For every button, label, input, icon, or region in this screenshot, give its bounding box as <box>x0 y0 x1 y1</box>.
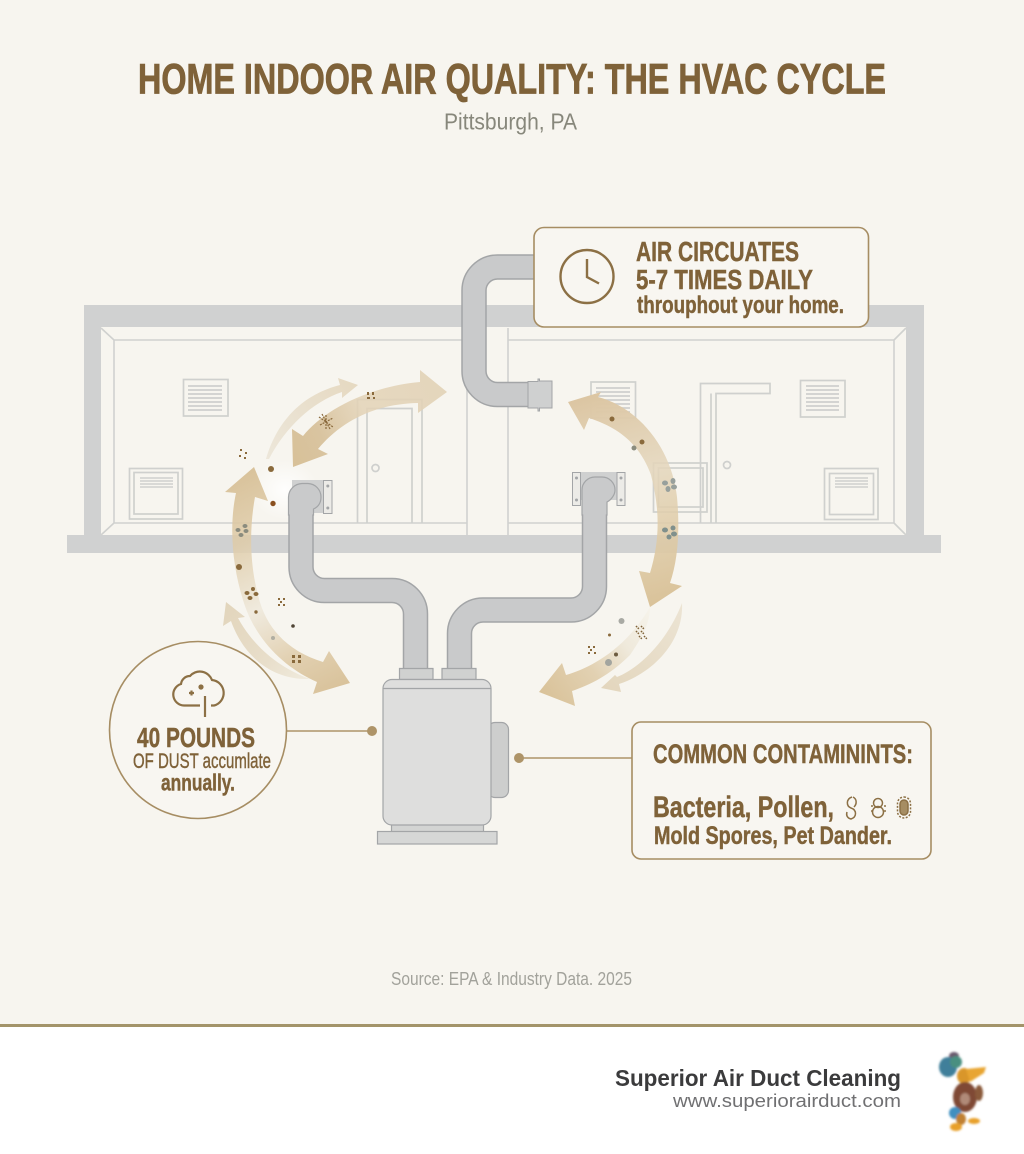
arrow: lower right large <box>539 607 650 706</box>
right register bracket <box>572 472 625 506</box>
right door frame <box>700 384 770 523</box>
icon: clock <box>560 250 614 303</box>
cabinet body <box>383 680 491 825</box>
contaminants line one: Bacteria, Pollen, <box>653 791 834 824</box>
icon: duck mascot <box>939 1052 986 1131</box>
footer band <box>0 1024 1024 1154</box>
left wall vent <box>184 380 228 416</box>
centre wall panel <box>654 463 707 512</box>
air handler unit <box>378 668 508 844</box>
dust particles <box>236 392 677 666</box>
arrow: lower left thin <box>223 602 310 679</box>
footer company name: Superior Air Duct Cleaning <box>615 1065 901 1091</box>
arrow: upper left thin <box>266 378 358 459</box>
source note: Source: EPA & Industry Data. 2025 <box>391 969 632 989</box>
right wall vent two <box>800 380 845 417</box>
duct flange <box>528 379 552 411</box>
callout body: throuphout your home. <box>637 292 844 319</box>
arrow: upper left large double headed <box>292 370 447 467</box>
stat label: OF DUST accumlate <box>133 750 271 773</box>
right return duct <box>460 477 615 670</box>
stat value: 40 POUNDS <box>137 722 255 753</box>
left register bracket <box>292 480 332 514</box>
left return duct <box>288 484 416 670</box>
footer website: www.superiorairduct.com <box>672 1091 901 1111</box>
callout: common contaminants <box>632 722 931 859</box>
connector: unit to contaminants callout <box>514 753 632 763</box>
contaminants heading: COMMON CONTAMININTS: <box>653 739 913 769</box>
callout heading line two: 5-7 TIMES DAILY <box>636 264 813 295</box>
icons: microbes <box>847 797 910 819</box>
top supply duct <box>474 267 552 411</box>
lower right return vent <box>824 468 878 520</box>
callout: dust accumulation <box>110 642 286 818</box>
stat label second line: annually. <box>161 770 235 796</box>
arrow: lower right thin <box>601 603 682 692</box>
connector: dust callout to unit <box>287 726 377 736</box>
base plate <box>378 832 497 844</box>
house outline <box>67 305 941 553</box>
lower left return vent <box>130 468 182 519</box>
contaminants line two: Mold Spores, Pet Dander. <box>654 822 892 850</box>
arrow: left large double headed <box>225 467 350 694</box>
glow near left register <box>251 460 319 520</box>
callout heading line one: AIR CIRCUATES <box>636 236 799 267</box>
left door <box>358 400 422 523</box>
arrow: right large <box>568 392 682 607</box>
side panel <box>488 722 508 798</box>
icon: dust cloud <box>173 672 224 717</box>
base foot <box>392 824 484 832</box>
inlet collars <box>400 668 476 680</box>
callout: air circulation <box>534 228 868 327</box>
subtitle: Pittsburgh, PA <box>444 108 577 134</box>
right wall vent one <box>591 382 636 418</box>
